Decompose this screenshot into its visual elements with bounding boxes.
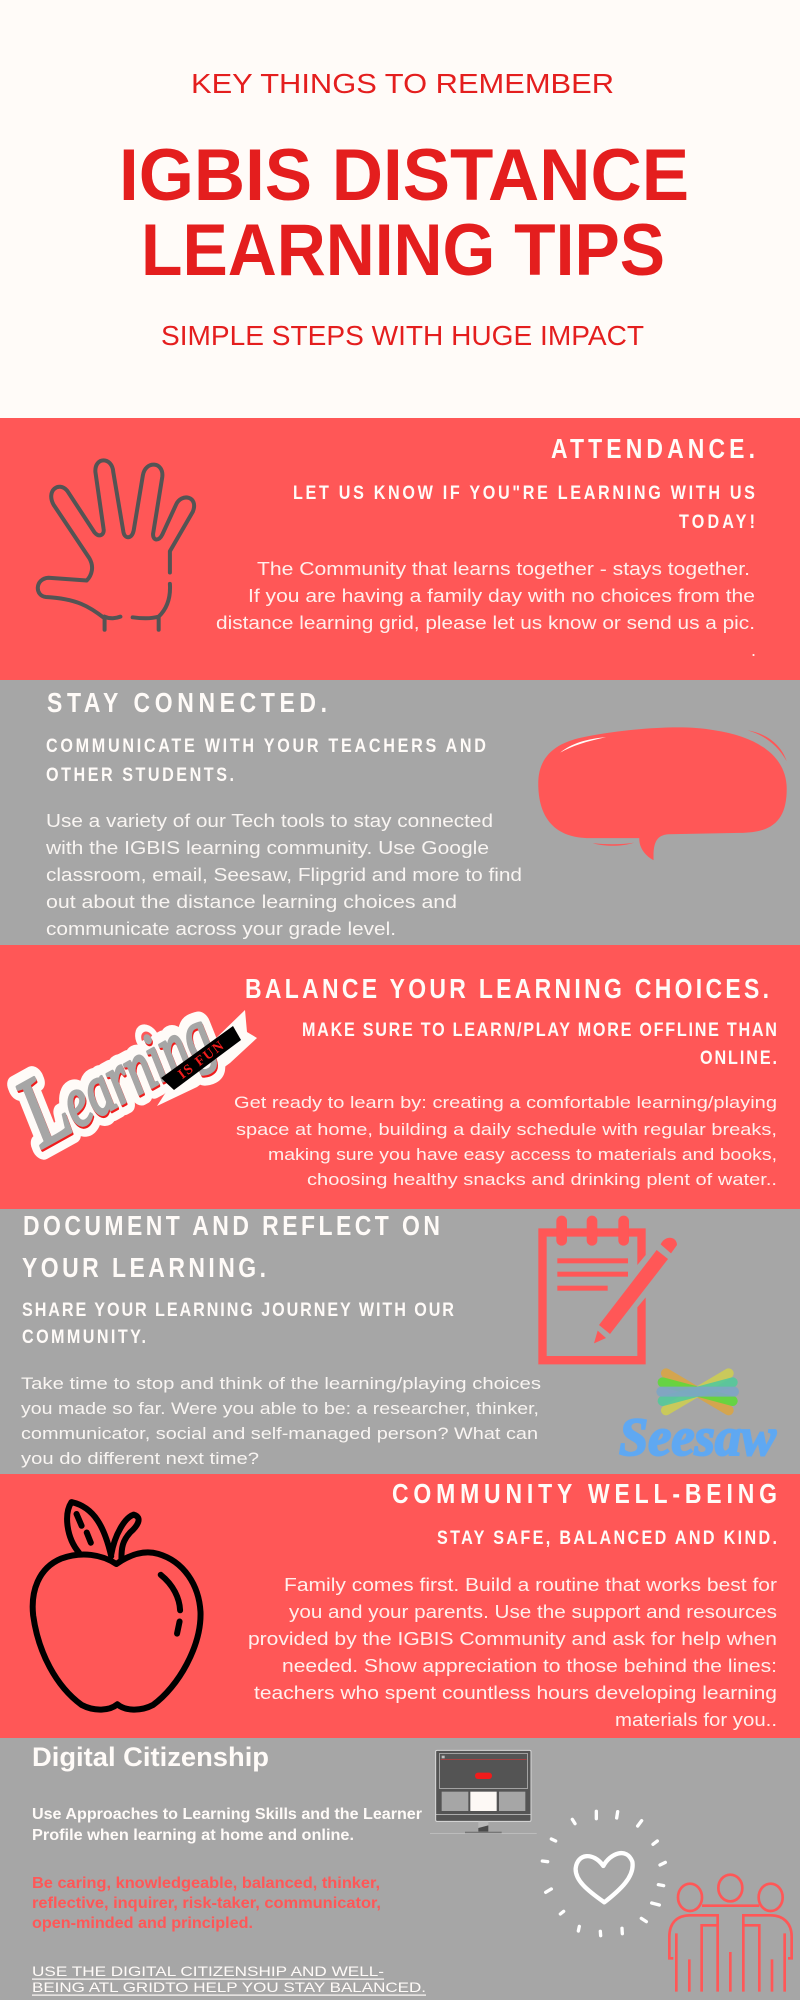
text block: learner profile traits: reflective, inquirer, risk-taker, communicator, bbox=[32, 1895, 381, 1912]
text block: attendance body: . bbox=[751, 640, 756, 660]
panel: document and reflect bbox=[0, 1209, 800, 1474]
subheading: stay connected bbox=[46, 735, 486, 785]
text block: learner profile traits: Be caring, knowledgeable, balanced, thinker, bbox=[32, 1875, 380, 1892]
heading: document and reflect: DOCUMENT AND REFLECT ON bbox=[23, 1211, 440, 1242]
text block: balance body bbox=[234, 1093, 777, 1189]
icon: desktop monitor bbox=[430, 1750, 537, 1834]
text block: balance body: Get ready to learn by: creating a comfortable learning/playing bbox=[234, 1093, 777, 1112]
heading: attendance: ATTENDANCE. bbox=[551, 434, 755, 465]
subheading: balance bbox=[302, 1019, 777, 1068]
main title: LEARNING TIPS bbox=[141, 210, 665, 291]
text block: stay connected body bbox=[45, 811, 522, 939]
logo: seesaw bbox=[619, 1373, 777, 1467]
heading: stay connected: STAY CONNECTED. bbox=[47, 688, 327, 719]
text block: document and reflect body: you made so far. Were you able to be: a researcher, thinker, bbox=[21, 1399, 539, 1418]
main title: IGBIS DISTANCE bbox=[119, 135, 689, 216]
icon: speech bubble bbox=[538, 727, 787, 860]
icon: notepad and pencil bbox=[538, 1216, 677, 1364]
text block: community well-being body: you and your parents. Use the support and resources bbox=[289, 1601, 777, 1622]
heading: document and reflect bbox=[22, 1211, 440, 1284]
heading: document and reflect: YOUR LEARNING. bbox=[22, 1253, 266, 1284]
text block: stay connected body: out about the distance learning choices and bbox=[46, 892, 457, 912]
text block: community well-being body: Family comes first. Build a routine that works best for bbox=[284, 1574, 777, 1595]
text block: balance body: choosing healthy snacks and drinking plent of water.. bbox=[307, 1170, 777, 1189]
link: digital citizenship grid bbox=[32, 1963, 426, 1996]
sticker: learning is fun: IS FUN bbox=[176, 1038, 228, 1083]
sticker: learning is fun: Learning bbox=[0, 972, 229, 1168]
text block: balance body: space at home, building a daily schedule with regular breaks, bbox=[236, 1120, 777, 1139]
text block: stay connected body: communicate across your grade level. bbox=[46, 919, 396, 939]
text block: document and reflect body: communicator, social and self-managed person? What can bbox=[21, 1424, 538, 1443]
text block: community well-being body bbox=[248, 1574, 777, 1730]
header: title block bbox=[119, 68, 689, 351]
text block: attendance body: The Community that learns together - stays together. bbox=[257, 559, 750, 579]
text block: document and reflect body bbox=[21, 1374, 541, 1468]
subheading: attendance bbox=[293, 482, 755, 532]
subheading: balance: ONLINE. bbox=[700, 1047, 777, 1068]
heading: community well-being: COMMUNITY WELL-BEING bbox=[392, 1479, 777, 1510]
logo: seesaw: Seesaw bbox=[619, 1407, 777, 1467]
text block: attendance body bbox=[216, 559, 756, 660]
panel: community well-being bbox=[0, 1474, 800, 1738]
heading: balance: BALANCE YOUR LEARNING CHOICES. bbox=[245, 974, 769, 1005]
text block: community well-being body: provided by the IGBIS Community and ask for help when bbox=[248, 1628, 777, 1649]
subheading: community well-being: STAY SAFE, BALANCED AND KIND. bbox=[437, 1527, 777, 1548]
subheading: stay connected: OTHER STUDENTS. bbox=[46, 764, 234, 785]
text block: document and reflect body: Take time to stop and think of the learning/playing choices bbox=[21, 1374, 541, 1393]
heading: digital citizenship: Digital Citizenship bbox=[32, 1742, 269, 1772]
text block: community well-being body: teachers who spent countless hours developing learning bbox=[254, 1682, 777, 1703]
text block: learner profile traits bbox=[32, 1875, 381, 1932]
text block: approaches to learning bbox=[32, 1806, 422, 1844]
link: digital citizenship grid: USE THE DIGITAL CITIZENSHIP AND WELL- bbox=[32, 1963, 384, 1979]
subheading: balance: MAKE SURE TO LEARN/PLAY MORE OFFLINE THAN bbox=[302, 1019, 777, 1040]
text block: approaches to learning: Profile when learning at home and online. bbox=[32, 1827, 354, 1844]
icon: raised hand bbox=[38, 460, 194, 630]
text block: attendance body: If you are having a family day with no choices from the bbox=[248, 586, 755, 606]
subheading: attendance: TODAY! bbox=[679, 511, 755, 532]
text block: stay connected body: classroom, email, Seesaw, Flipgrid and more to find bbox=[46, 865, 522, 885]
icon: heart with rays bbox=[542, 1811, 665, 1936]
panel: digital citizenship bbox=[0, 1738, 800, 2000]
subheading: document and reflect: SHARE YOUR LEARNING JOURNEY WITH OUR bbox=[22, 1299, 454, 1320]
text block: stay connected body: Use a variety of our Tech tools to stay connected bbox=[46, 811, 493, 831]
panel: balance your learning choices bbox=[0, 945, 800, 1209]
link: digital citizenship grid: BEING ATL GRIDTO HELP YOU STAY BALANCED. bbox=[32, 1979, 426, 1995]
subheading: document and reflect: COMMUNITY. bbox=[22, 1326, 146, 1347]
panel: stay connected bbox=[0, 680, 800, 945]
text block: community well-being body: materials for you.. bbox=[615, 1709, 777, 1730]
text block: stay connected body: with the IGBIS learning community. Use Google bbox=[45, 838, 489, 858]
subtitle: SIMPLE STEPS WITH HUGE IMPACT bbox=[161, 320, 644, 351]
kicker: key things to remember: KEY THINGS TO REMEMBER bbox=[191, 68, 614, 99]
text block: learner profile traits: open-minded and principled. bbox=[32, 1915, 253, 1932]
main title bbox=[119, 135, 689, 291]
subheading: stay connected: COMMUNICATE WITH YOUR TEACHERS AND bbox=[46, 735, 486, 756]
text block: balance body: making sure you have easy access to materials and books, bbox=[268, 1145, 777, 1164]
text block: community well-being body: needed. Show appreciation to those behind the lines: bbox=[282, 1655, 777, 1676]
text block: approaches to learning: Use Approaches to Learning Skills and the Learner bbox=[32, 1806, 422, 1823]
sticker: learning is fun: Learning bbox=[0, 972, 229, 1168]
text block: attendance body: distance learning grid, please let us know or send us a pic. bbox=[216, 613, 755, 633]
icon: apple bbox=[33, 1502, 201, 1710]
panel: attendance bbox=[0, 418, 800, 680]
text block: document and reflect body: you do different next time? bbox=[21, 1449, 259, 1468]
sticker: learning is fun: Learning bbox=[0, 974, 230, 1170]
subheading: document and reflect bbox=[22, 1299, 454, 1347]
subheading: attendance: LET US KNOW IF YOU"RE LEARNING WITH US bbox=[293, 482, 755, 503]
icon: three people bbox=[669, 1875, 792, 1992]
